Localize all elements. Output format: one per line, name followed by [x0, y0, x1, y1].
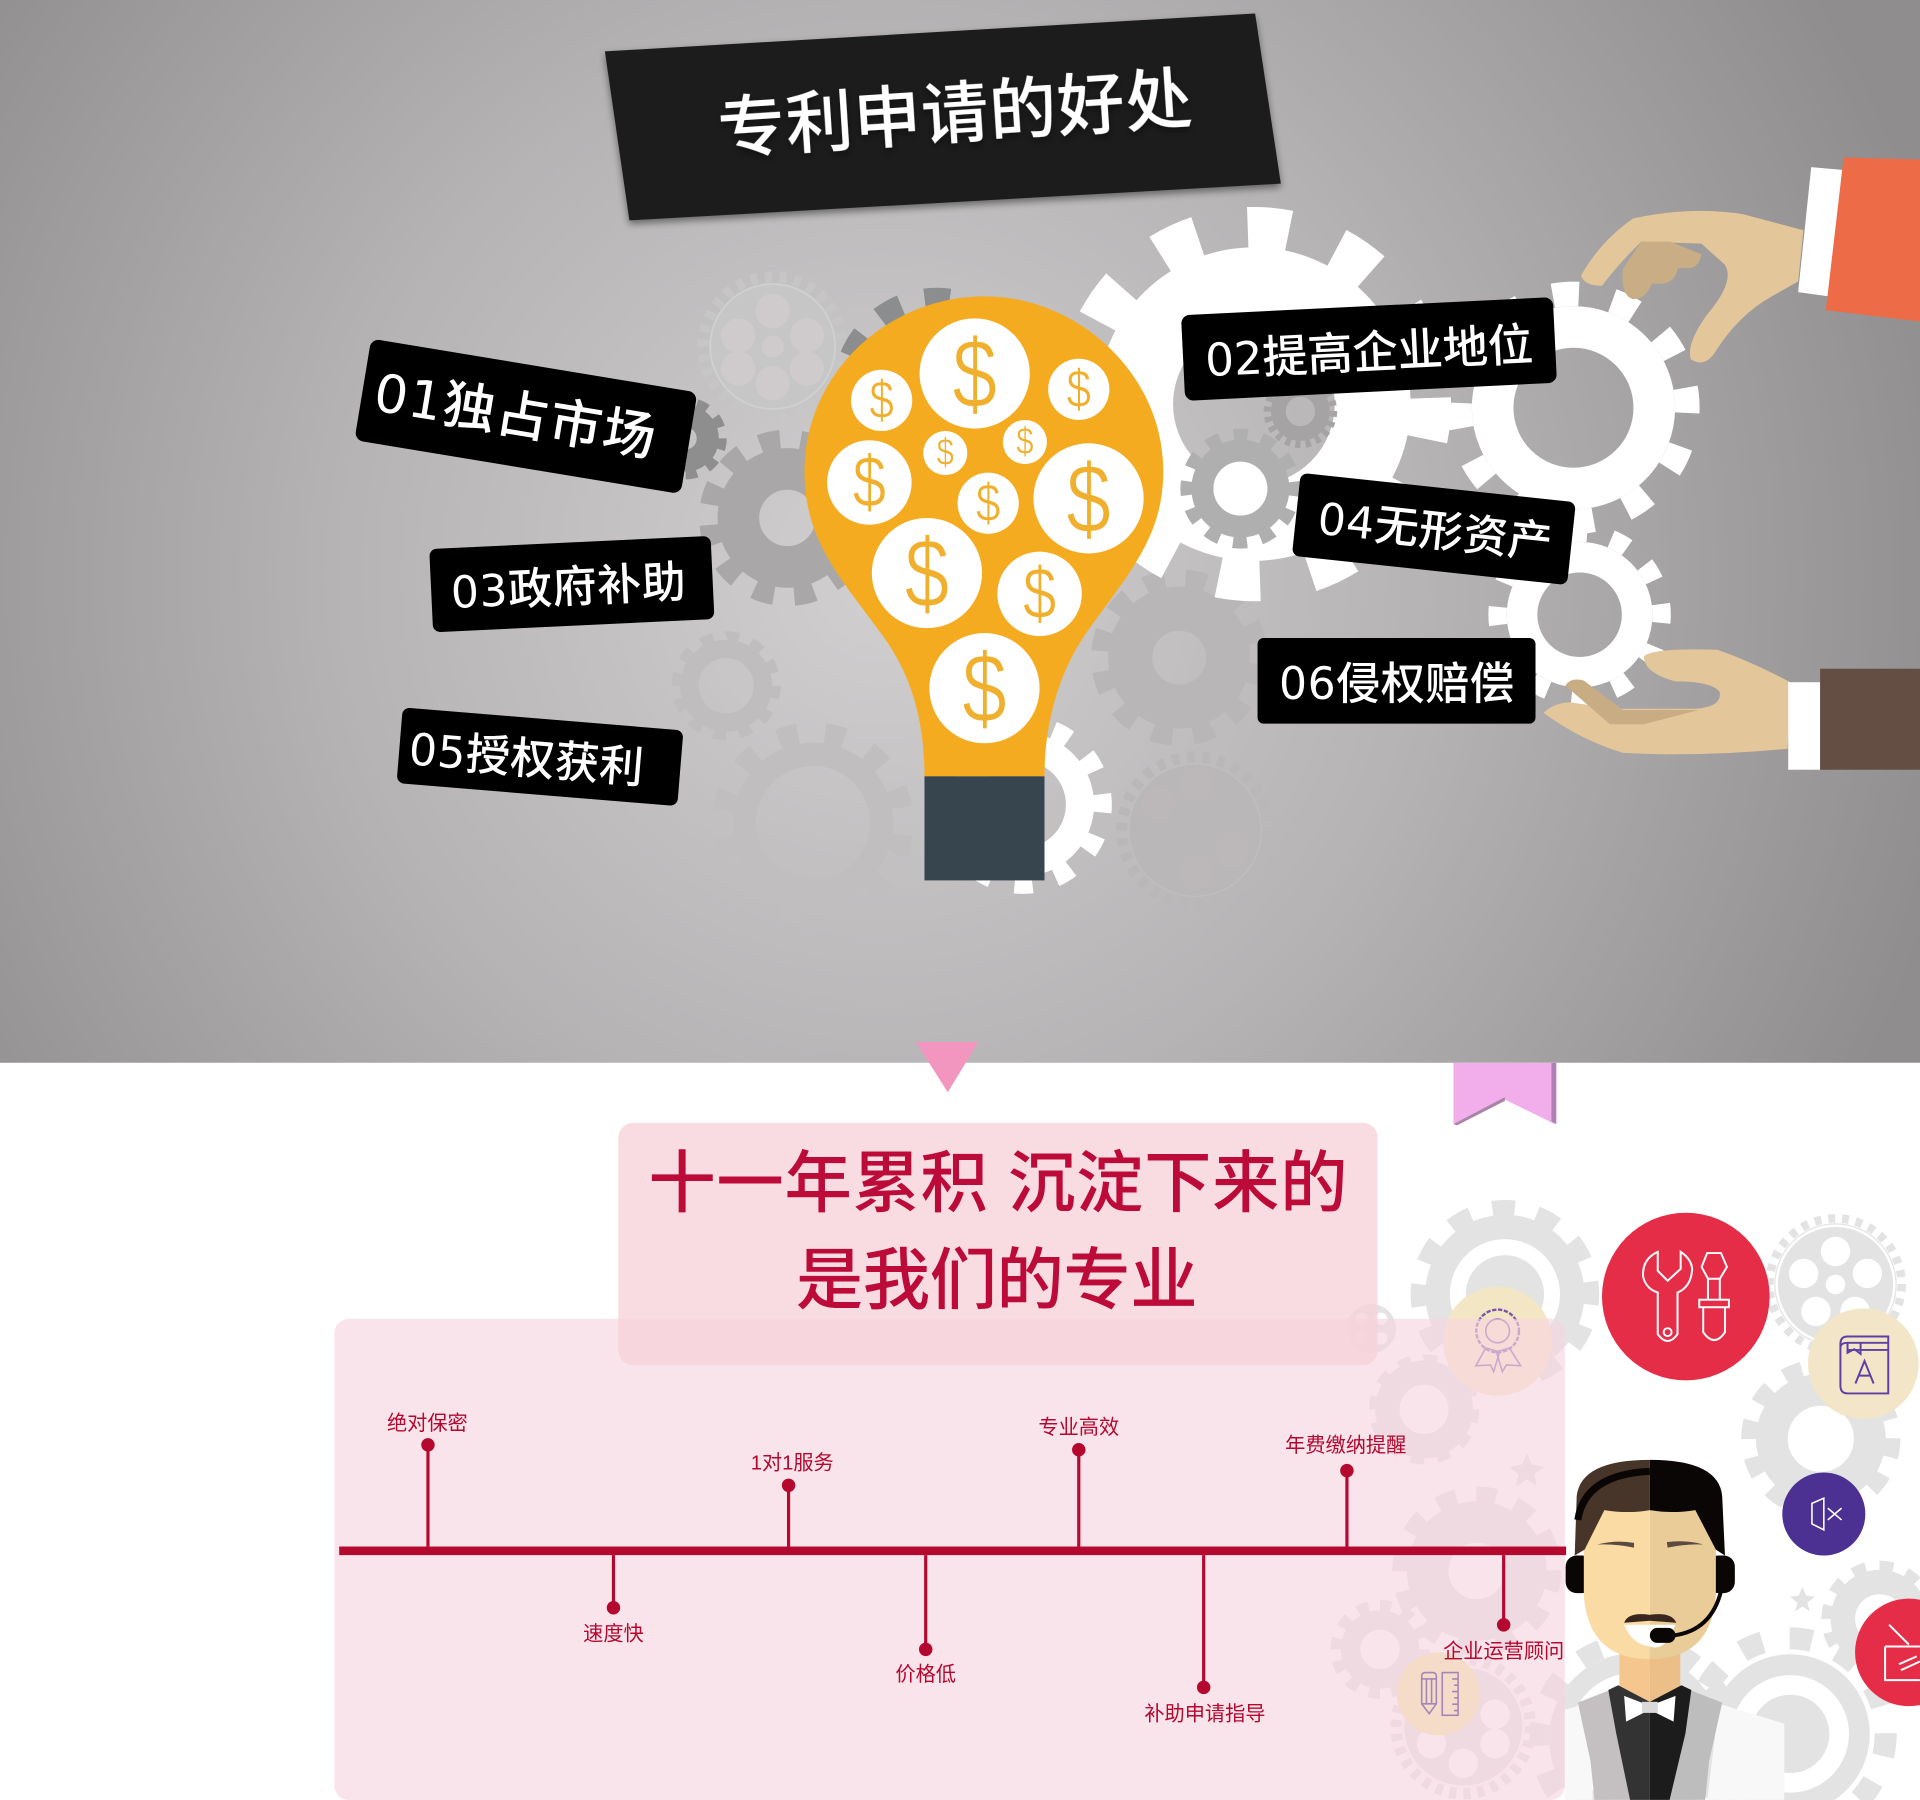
timeline chart: 价格低 [895, 1663, 956, 1686]
label: 03: 03政府补助 [450, 557, 687, 619]
icon: money light bulb: $ [1066, 359, 1091, 419]
gear: behind panel lower left [1336, 1605, 1424, 1693]
face [1584, 1510, 1650, 1659]
timeline chart: 1对1服务 [751, 1451, 834, 1474]
panel: grey top background [0, 0, 1920, 1063]
panel: light grey background gears [1336, 1197, 1920, 1800]
timeline chart: 年费缴纳提醒 [1285, 1434, 1406, 1457]
gear: faint top left with holes [703, 277, 842, 416]
icon: purple mute speaker circle [1782, 1473, 1865, 1556]
headband [1578, 1471, 1650, 1520]
gear: faint lower right with holes [1122, 757, 1269, 904]
icon: cream book circle [1808, 1308, 1919, 1419]
icon: cream award circle [1443, 1287, 1552, 1396]
label: 03 [429, 536, 714, 632]
gear: dark behind bulb top [834, 289, 1039, 494]
label: 06 [1258, 638, 1536, 724]
illustration: customer service man [1565, 1460, 1784, 1800]
gear: white right [1442, 276, 1705, 540]
gear: top centre [1408, 1197, 1602, 1391]
gear: behind panel small with holes [1347, 1304, 1396, 1353]
mouth and moustache [1624, 1625, 1676, 1648]
icon: money light bulb: $ [853, 441, 886, 523]
icon: money light bulb: $ [962, 633, 1007, 743]
icon: red TV circle [1855, 1599, 1920, 1706]
icon: money light bulb: $ [1016, 421, 1034, 463]
title banner [605, 13, 1281, 220]
gear: faint large bottom [712, 722, 914, 924]
timeline chart: 专业高效 [1038, 1416, 1119, 1439]
panel: heading pink card [618, 1123, 1378, 1365]
timeline chart: 补助申请指导 [1144, 1702, 1265, 1725]
gear: white behind bulb base [934, 716, 1111, 893]
gear: right lower [1827, 1566, 1920, 1671]
icon: money light bulb: $ [976, 473, 1000, 533]
gear: behind panel centre [1401, 1495, 1553, 1647]
icon: red tools circle [1602, 1213, 1770, 1380]
gear: mid right [1094, 573, 1264, 742]
label: 01: 01独占市场 [370, 362, 660, 469]
gear: behind panel bottom with holes [1396, 1659, 1531, 1794]
icon: pencil and ruler circle [1397, 1652, 1480, 1735]
icon: money light bulb: $ [1023, 553, 1056, 635]
icon: lower hand with brown sleeve [1543, 649, 1920, 770]
neck [1619, 1639, 1650, 1702]
bow tie [1624, 1696, 1676, 1722]
icon: money light bulb: $ [1066, 444, 1111, 553]
headset ears [1566, 1556, 1593, 1593]
label: 04 [1292, 473, 1576, 585]
label: 06: 06侵权赔偿 [1279, 659, 1514, 710]
timeline chart: 绝对保密 [387, 1412, 468, 1435]
gear: right middle [1750, 1368, 1892, 1510]
jacket [1578, 1686, 1650, 1800]
panel: gears behind the bulb [650, 223, 1705, 924]
gear: small grey on white [1180, 429, 1300, 549]
gear: dark behind label 01 [650, 403, 721, 474]
icon: grey stars [1510, 1453, 1815, 1611]
icon: money light bulb: $ [905, 518, 949, 628]
label: 04: 04无形资产 [1315, 494, 1554, 569]
timeline chart: 速度快 [583, 1623, 644, 1646]
gear: faint left small [676, 636, 776, 736]
panel: timeline pink backdrop [334, 1319, 1565, 1800]
timeline chart: 企业运营顾问 [1443, 1640, 1564, 1663]
translucent white coat [1565, 1702, 1784, 1800]
hair [1575, 1460, 1650, 1556]
timeline chart [339, 1412, 1566, 1725]
icon: money light bulb: $ [937, 432, 954, 474]
gear: large white [1073, 223, 1435, 585]
heading text [648, 1147, 1348, 1318]
label: 05 [397, 707, 683, 806]
heading text: 是我们的专业 [796, 1243, 1198, 1318]
gear: white lower right [1488, 523, 1671, 706]
microphone boom [1674, 1591, 1721, 1635]
icon: money light bulb: $ [869, 370, 894, 430]
label: 01 [354, 339, 697, 494]
label: 02: 02提高企业地位 [1204, 318, 1534, 387]
gear: top right with holes [1769, 1218, 1902, 1351]
label: 05: 05授权获利 [407, 724, 646, 794]
gear: bottom right large [1695, 1638, 1886, 1800]
vest [1608, 1685, 1650, 1800]
gear: small grey under label 02 [1267, 378, 1333, 444]
heading text: 十一年累积 沉淀下来的 [648, 1147, 1348, 1222]
gear: left of bulb [697, 427, 878, 609]
title banner: 专利申请的好处 [716, 62, 1195, 168]
gear: behind the man [1533, 1637, 1737, 1800]
gear: behind panel upper [1374, 1359, 1474, 1460]
eyebrows [1597, 1541, 1703, 1548]
icon: money light bulb [804, 296, 1163, 880]
icon: pink bookmark [1453, 1063, 1556, 1125]
label: 02 [1181, 297, 1557, 401]
icon: money light bulb: $ [952, 319, 997, 428]
icon: upper hand with orange sleeve [1581, 157, 1920, 362]
panel: lower white background [0, 1063, 1920, 1800]
icon: pink down triangle [916, 1042, 978, 1092]
